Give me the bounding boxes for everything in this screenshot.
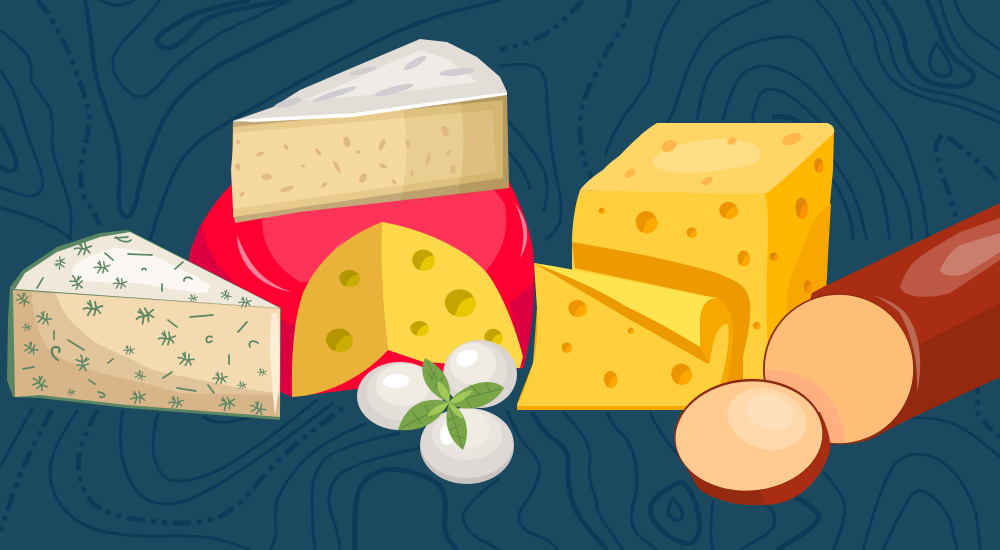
blue cheese wedge [7, 230, 281, 420]
cut wedge of the yellow cheese [292, 222, 523, 397]
wheel: red wax base [189, 177, 534, 397]
basil leaves [398, 358, 504, 450]
brie: white rind top [233, 39, 507, 122]
wedge: right cut face [381, 222, 523, 368]
mozzarella: left [357, 362, 443, 430]
blue cheese: side [13, 290, 280, 417]
sausage: highlight [900, 218, 1000, 297]
yellow cheese block [572, 123, 834, 400]
sausage: cut end [763, 294, 914, 444]
brie: crumbs [234, 117, 488, 197]
block: front [572, 190, 770, 400]
wheel: highlights [237, 235, 292, 292]
mozzarella: back right [443, 340, 517, 408]
brie: shaded panels [400, 95, 509, 204]
block: right face [755, 130, 834, 400]
block: top [580, 123, 834, 194]
brie: rind marks [274, 53, 475, 110]
blue cheese: top [15, 232, 280, 308]
slice: body [517, 263, 731, 406]
slice: fold top [534, 263, 717, 347]
sausage [763, 203, 1000, 444]
wheel of red wax cheese [189, 177, 534, 397]
blue cheese: mold veins [14, 237, 267, 417]
brie: paste [231, 110, 496, 209]
mozzarella: front [420, 408, 514, 484]
block: holes [636, 211, 658, 234]
slice: curl ring [699, 298, 733, 385]
slice: outline [670, 374, 828, 496]
folded cheese slice [517, 263, 760, 410]
mozzarella balls with basil [357, 340, 517, 484]
sausage: lower shadow [847, 303, 1000, 444]
sausage slice [670, 374, 830, 505]
slice: side [677, 412, 830, 505]
slice: fold underside [534, 263, 732, 364]
wedge: left cut face [292, 222, 388, 397]
brie wedge [231, 39, 509, 223]
brie: side crust [232, 95, 509, 223]
wheel: pink centre [262, 180, 506, 282]
wedge: holes [339, 270, 360, 287]
blue cheese: green rind [7, 230, 281, 420]
brie: inner crust band [233, 100, 503, 217]
wheel: crimson left shade [189, 223, 295, 397]
block: curl shadow [572, 242, 750, 385]
slice: holes [568, 300, 587, 317]
slice: base edge [517, 263, 690, 410]
slice: face [672, 377, 826, 495]
wheel: crimson right shade [510, 283, 533, 368]
